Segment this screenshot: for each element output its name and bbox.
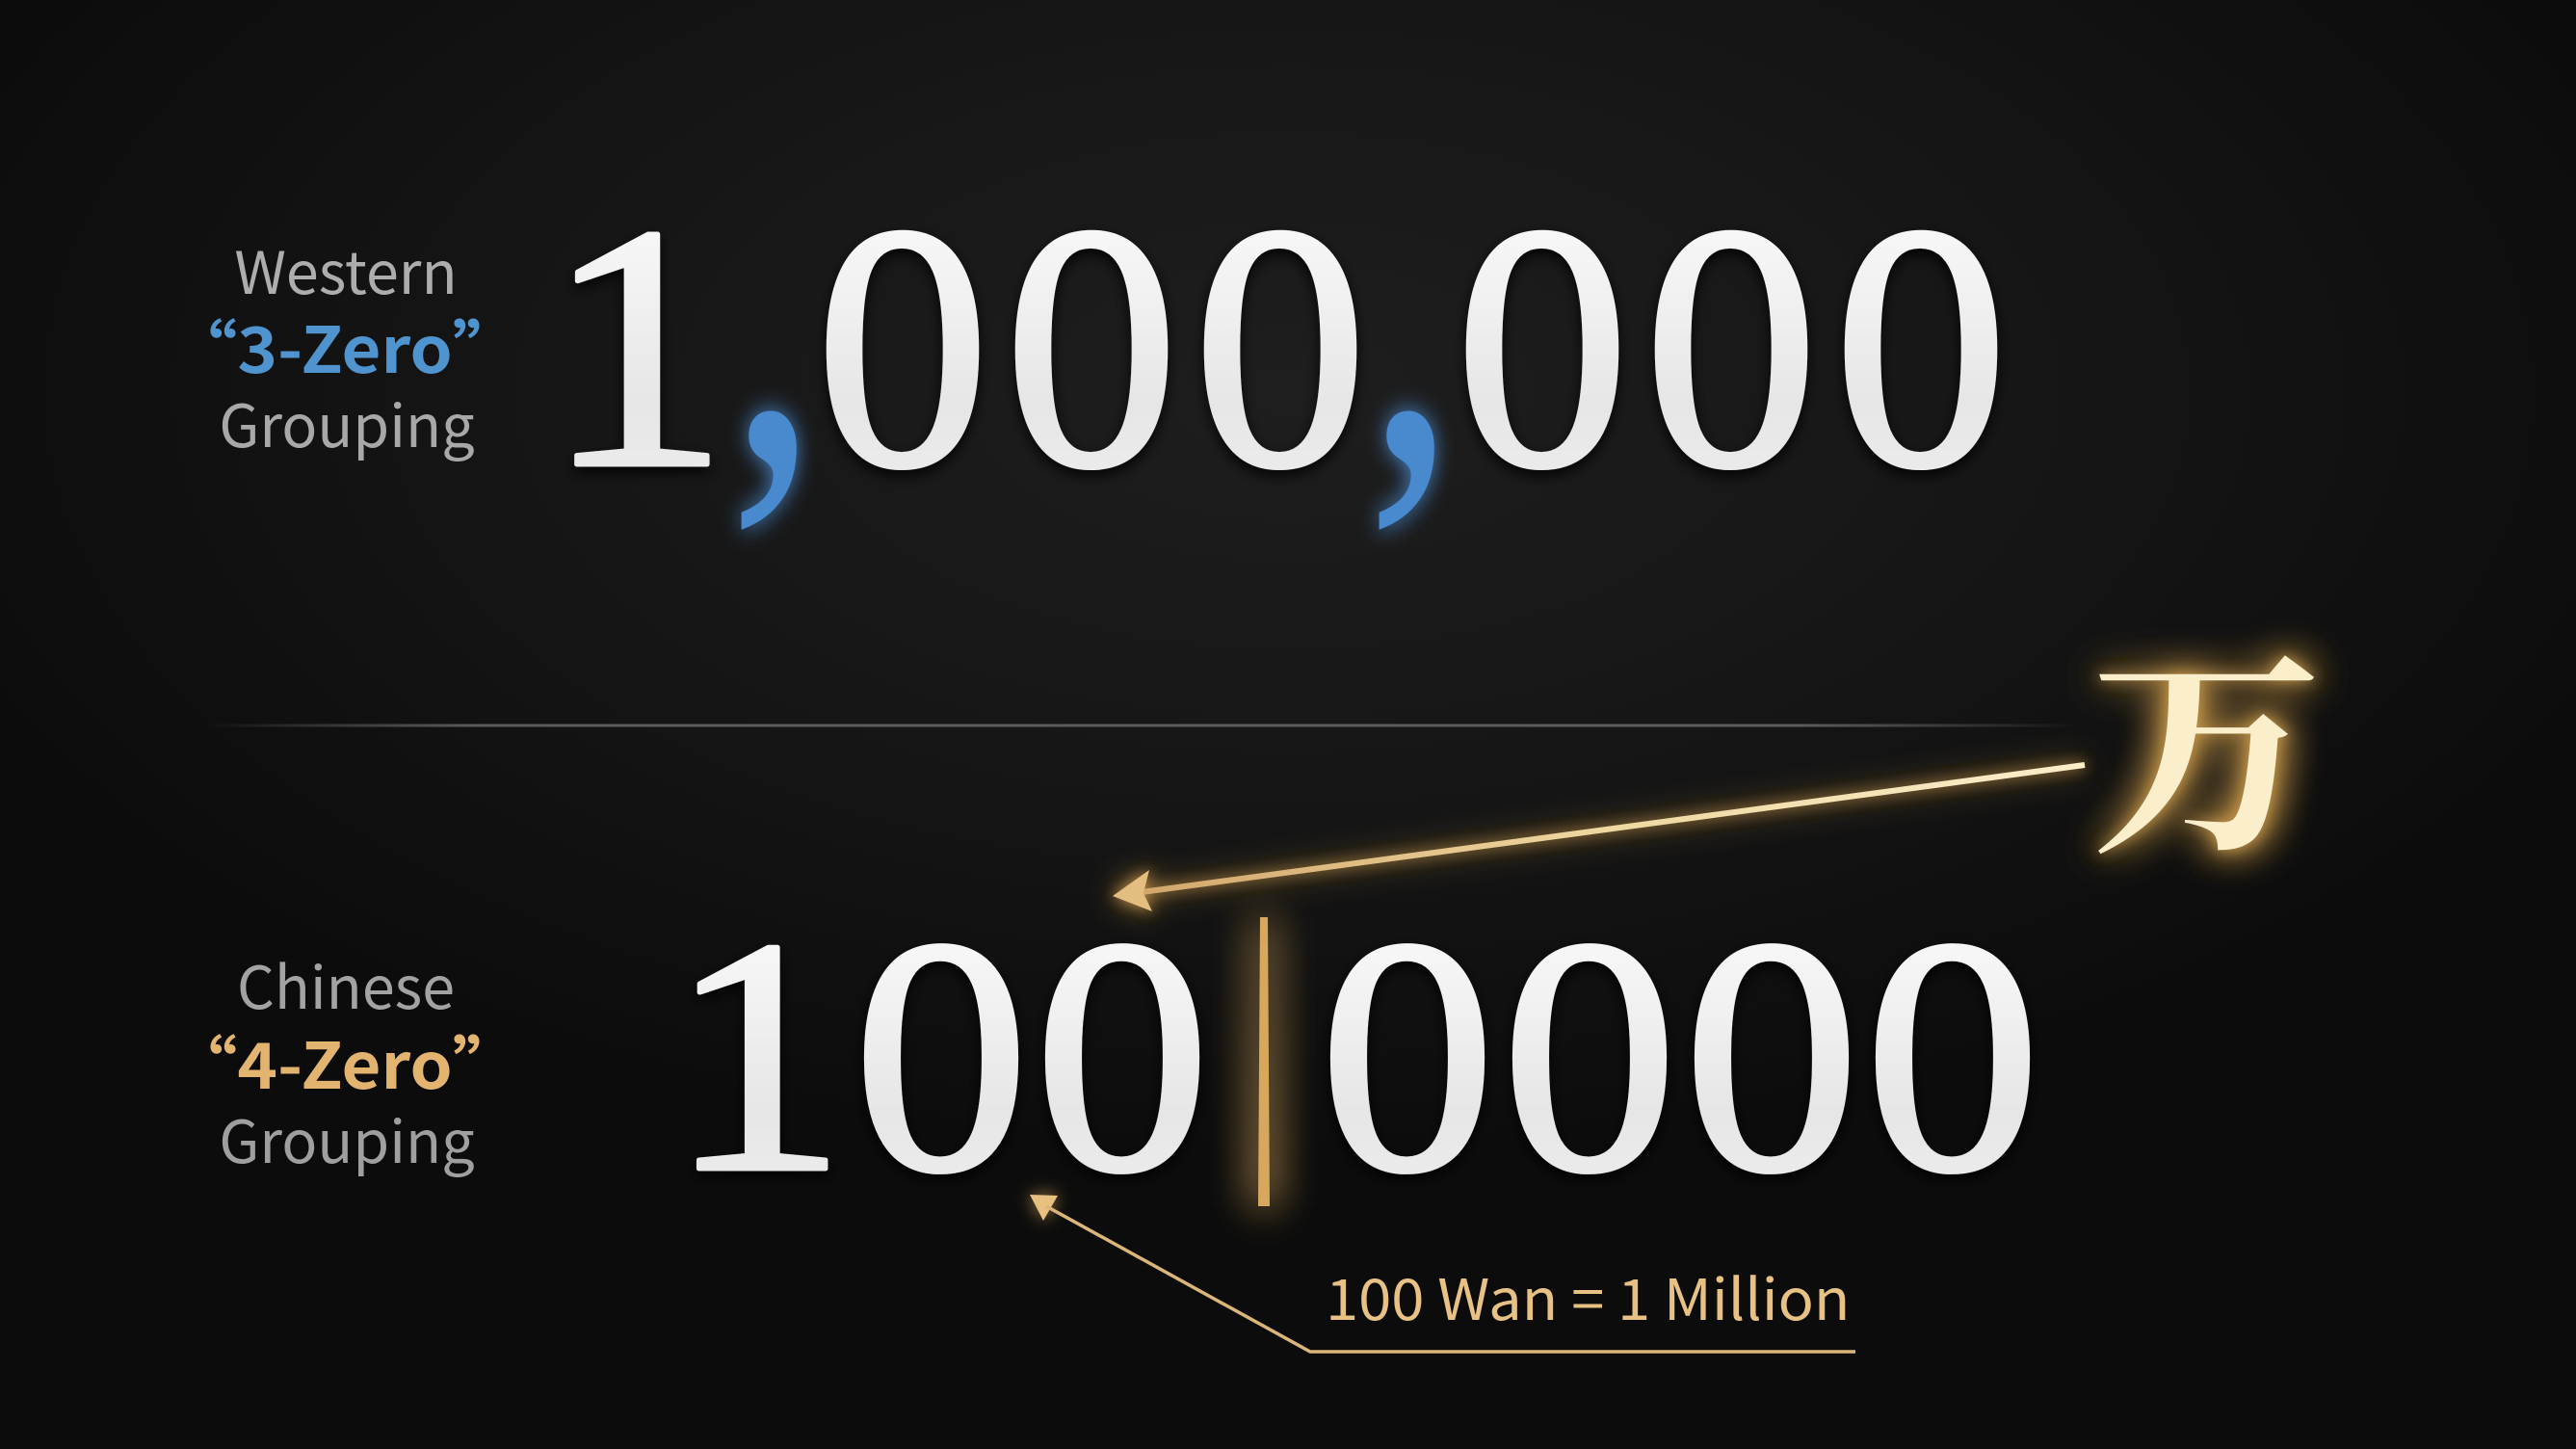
- arrow head: [1030, 1195, 1058, 1221]
- digit 0: 0: [1004, 154, 1179, 540]
- divider line: [202, 724, 2081, 726]
- digit 0: 0: [815, 154, 990, 540]
- digit 0: 0: [1643, 154, 1819, 540]
- digit 0: 0: [854, 871, 1029, 1242]
- digit 0: 0: [1502, 871, 1677, 1242]
- label: Grouping: Grouping: [219, 379, 475, 464]
- gold character wan: 万: [2090, 583, 2322, 897]
- gold separator bar: [1258, 917, 1270, 1206]
- label: Western: Western: [234, 225, 458, 311]
- blue comma: ,: [727, 48, 820, 560]
- label: 4-Zero: “4-Zero”: [170, 1015, 520, 1107]
- arrow from wan to separator: [1113, 765, 2085, 911]
- western number 1,000,000: [544, 48, 2008, 560]
- digit 0: 0: [1834, 154, 2008, 540]
- digit 1: 1: [668, 870, 847, 1241]
- digit 0: 0: [1320, 871, 1495, 1242]
- digit 0: 0: [1193, 154, 1368, 540]
- label: Chinese: Chinese: [237, 940, 455, 1026]
- label: 3-Zero: “3-Zero”: [170, 300, 520, 391]
- western row label: [170, 225, 520, 464]
- digit 0: 0: [1684, 871, 1859, 1242]
- digit 0: 0: [1865, 871, 2040, 1242]
- annotation arrow: [1030, 1195, 1855, 1352]
- digit 0: 0: [1455, 154, 1630, 540]
- annotation text: 100 Wan = 1 Million: [1326, 1254, 1850, 1337]
- digit 1: 1: [544, 154, 729, 540]
- digit 0: 0: [1035, 871, 1210, 1242]
- leader line: [1046, 1206, 1855, 1352]
- chinese number 100 0000: [668, 870, 2040, 1242]
- chinese row label: [170, 940, 520, 1180]
- label: Grouping: Grouping: [219, 1094, 475, 1180]
- blue comma: ,: [1365, 48, 1458, 560]
